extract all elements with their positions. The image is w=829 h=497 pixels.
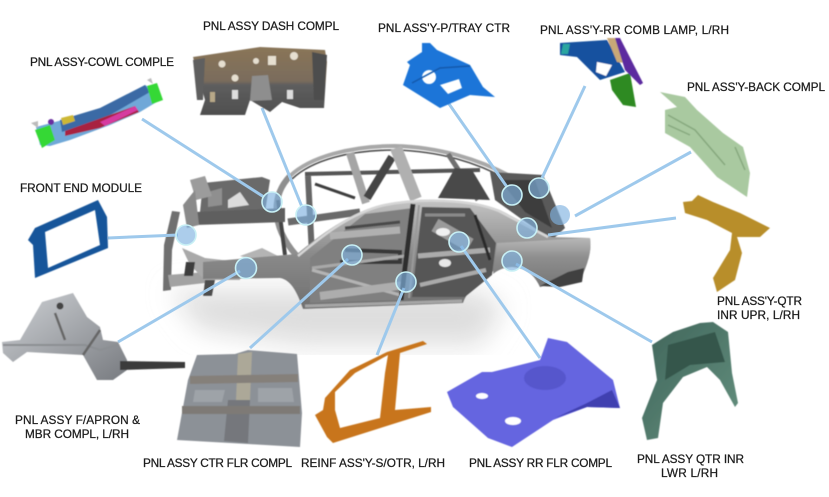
part: cowl — [31, 78, 163, 148]
label: quarter inner lower: LWR L/RH — [661, 466, 718, 480]
label: quarter inner lower: PNL ASSY QTR INR — [637, 452, 744, 466]
label: parcel tray: PNL ASS'Y-P/TRAY CTR — [378, 21, 510, 35]
part: quarter inner upper — [683, 195, 770, 292]
marker: centre floor — [342, 245, 362, 265]
far side frame — [276, 146, 510, 255]
part: dash — [193, 47, 327, 115]
label: quarter inner upper: PNL ASS'Y-QTR — [717, 294, 802, 308]
line: dash — [262, 108, 302, 207]
part: centre floor — [177, 350, 302, 447]
label: quarter inner upper — [717, 294, 802, 322]
part: front apron — [2, 293, 185, 380]
rear interior shading — [500, 180, 552, 228]
leader lines — [108, 86, 691, 358]
marker: apron — [236, 258, 256, 278]
marker: quarter lower — [502, 251, 522, 271]
rear parcel structure — [438, 168, 490, 200]
car body shell — [163, 146, 591, 345]
part: side outer — [315, 341, 431, 443]
label: cowl: PNL ASSY-COWL COMPLE — [30, 55, 174, 69]
part: back panel — [660, 92, 750, 197]
highlight markers — [176, 178, 570, 292]
part: parcel tray — [403, 43, 495, 108]
label: dash: PNL ASSY DASH COMPL — [203, 19, 339, 33]
label: quarter inner lower — [637, 452, 744, 480]
floor shadow — [170, 290, 505, 345]
line: front apron — [118, 271, 240, 342]
label: front end module: FRONT END MODULE — [20, 181, 142, 195]
label: side outer: REINF ASS'Y-S/OTR, L/RH — [301, 456, 445, 470]
marker: cowl — [262, 192, 282, 212]
line: centre floor — [250, 259, 348, 348]
marker: rear floor — [449, 232, 469, 252]
front radiator support — [163, 211, 180, 291]
label: rear lamp: PNL ASS'Y-RR COMB LAMP, L/RH — [540, 23, 729, 37]
marker: front end — [176, 225, 196, 245]
marker: side outer — [396, 272, 416, 292]
rear quarter panel — [493, 238, 591, 287]
label: front apron: PNL ASSY F/APRON & — [15, 413, 140, 427]
label: front apron — [15, 413, 140, 441]
label: quarter inner upper: INR UPR, L/RH — [717, 308, 800, 322]
label: back panel: PNL ASS'Y-BACK COMPL — [687, 80, 825, 94]
line: rear combination lamp — [542, 86, 585, 178]
line: quarter inner upper — [548, 218, 676, 235]
marker: lamp — [529, 178, 549, 198]
label: rear floor: PNL ASSY RR FLR COMPL — [469, 456, 612, 470]
line: rear floor — [461, 246, 540, 358]
marker: quarter upper — [517, 218, 537, 238]
marker: parcel tray — [502, 185, 522, 205]
line: front end module — [108, 235, 178, 238]
part: rear lamp panel — [560, 38, 643, 107]
part: rear floor — [447, 338, 620, 447]
door openings — [310, 208, 413, 303]
door holes — [436, 228, 450, 236]
near side body — [203, 200, 591, 309]
shock tower — [240, 248, 278, 262]
part: quarter inner lower — [642, 322, 738, 440]
label: front apron: MBR COMPL, L/RH — [25, 427, 129, 441]
line: parcel tray — [447, 101, 507, 187]
part: front end module — [28, 200, 108, 278]
label: centre floor: PNL ASSY CTR FLR COMPL — [143, 456, 292, 470]
line: back panel — [575, 152, 691, 216]
line: side outer — [377, 288, 404, 355]
marker: back panel — [550, 205, 570, 225]
front dash structure — [200, 177, 270, 214]
line: cowl — [142, 119, 264, 197]
line: quarter inner lower — [516, 264, 652, 342]
marker: dash — [296, 205, 316, 225]
door details — [298, 201, 548, 306]
